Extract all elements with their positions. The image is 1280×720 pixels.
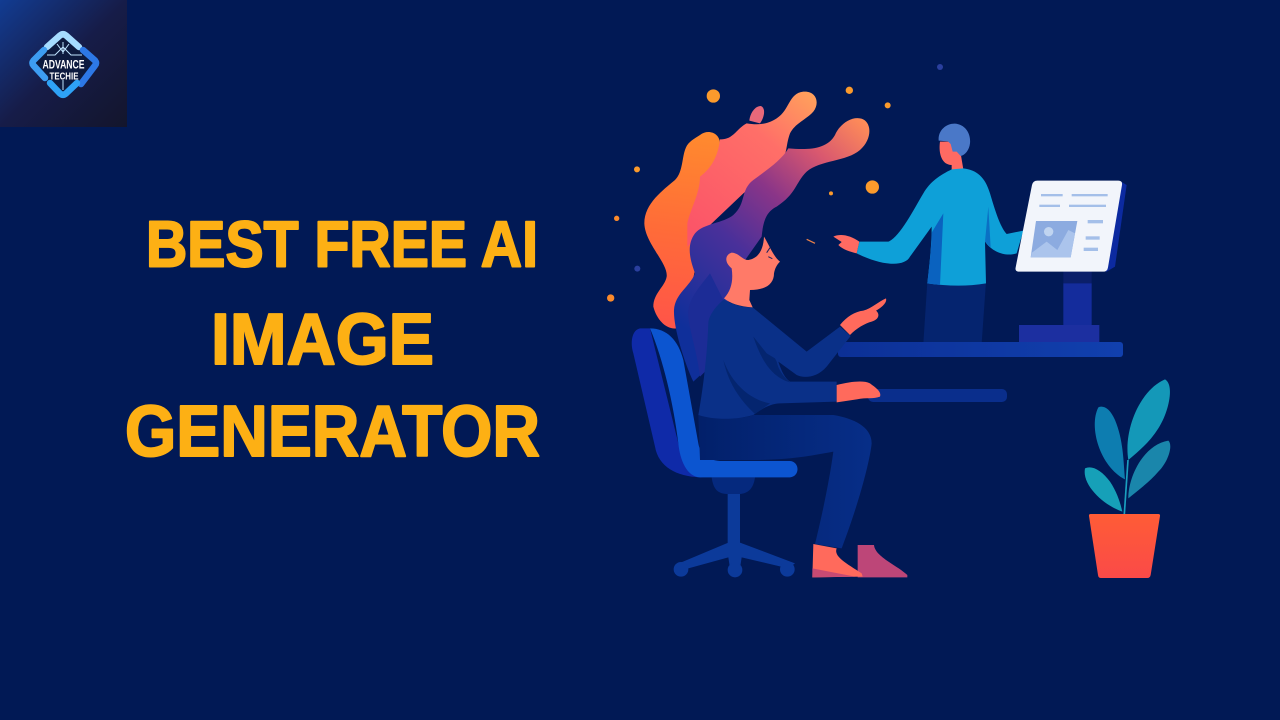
logo: Advance Techie: TECHIE <box>50 70 78 82</box>
woman: sweater <box>698 299 851 419</box>
plant: pot <box>1089 514 1160 578</box>
monitor <box>1015 181 1127 342</box>
title line 1: BEST FREE AI <box>146 208 538 280</box>
man: sweater <box>857 168 1023 286</box>
woman: body <box>698 299 907 577</box>
title line 3: GENERATOR <box>125 391 540 472</box>
woman: lower hand <box>837 382 880 402</box>
monitor: screen <box>1015 181 1122 272</box>
floating particles <box>607 64 943 302</box>
woman: shoes <box>812 544 907 577</box>
monitor: stand <box>1019 270 1099 342</box>
woman: head and pointing hand <box>724 237 886 335</box>
monitor: text lines <box>1039 194 1108 251</box>
desk: lower bar <box>868 389 1007 402</box>
plant: leaves <box>1085 379 1170 514</box>
man: head <box>939 124 970 171</box>
man: trousers <box>923 282 986 343</box>
monitor: image thumbnail <box>1031 221 1077 257</box>
title line 2: IMAGE <box>211 299 434 380</box>
logo: Advance Techie <box>0 0 127 127</box>
woman: flowing hair <box>644 92 869 382</box>
title <box>125 208 540 472</box>
desk: top bar <box>838 342 1123 357</box>
woman: legs <box>698 415 872 548</box>
woman: pointing hand <box>840 298 886 335</box>
woman: face <box>724 237 780 307</box>
man: hand <box>833 235 859 253</box>
logo: Advance Techie: ADVANCE <box>42 58 84 72</box>
chair <box>632 328 797 577</box>
plant <box>1085 379 1170 578</box>
man at monitor <box>833 124 1023 343</box>
